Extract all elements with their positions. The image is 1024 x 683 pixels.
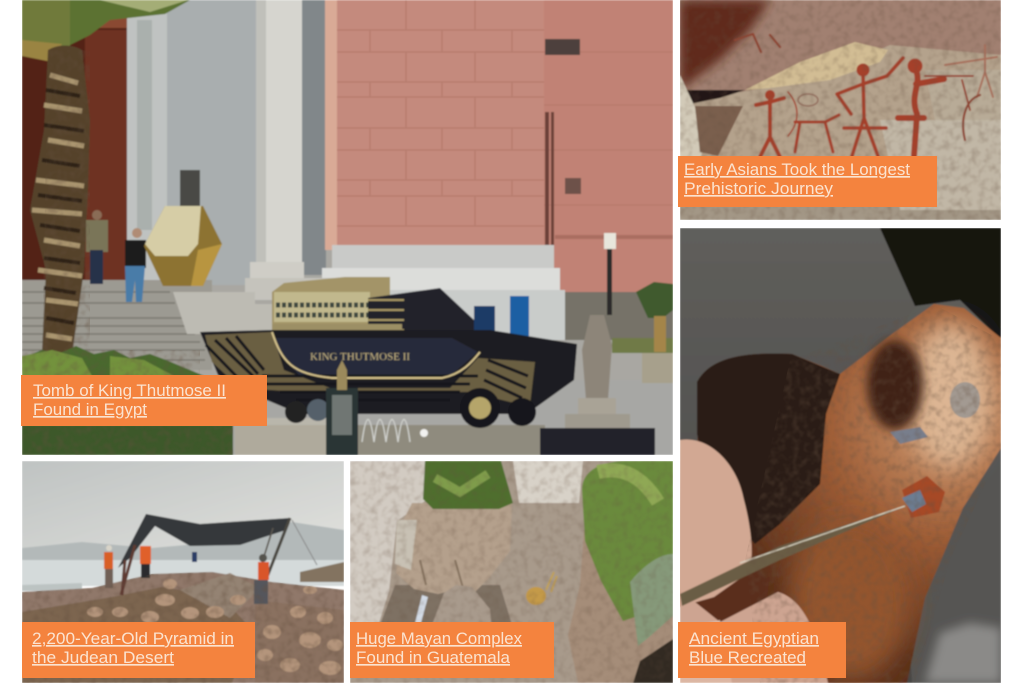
label: Early Asians bbox=[678, 156, 937, 207]
yellow artefact bbox=[526, 572, 557, 605]
ground bbox=[235, 338, 673, 455]
vehicle with cab: KING THUTMOSE II bbox=[310, 351, 410, 363]
door bbox=[22, 0, 127, 280]
label: Ancient Egyptian Blue: Ancient Egyptian bbox=[689, 630, 819, 648]
rock pile bbox=[22, 572, 344, 683]
panel: Mayan complex photo bbox=[350, 461, 673, 683]
visitors bbox=[86, 210, 146, 302]
small palm plant bbox=[636, 282, 673, 352]
painted red figures bbox=[735, 34, 997, 157]
label: Mayan Complex: Huge Mayan Complex bbox=[356, 630, 523, 648]
green bush bbox=[22, 346, 233, 455]
distant hills and water bbox=[22, 522, 344, 591]
label: Mayan Complex bbox=[350, 622, 554, 678]
museum wall bbox=[336, 0, 673, 295]
panel: Thutmose II photo bbox=[22, 0, 673, 455]
label: Early Asians: Early Asians Took the Longest bbox=[684, 161, 910, 179]
label: Mayan Complex: Found in Guatemala bbox=[356, 649, 511, 667]
fingers bbox=[679, 439, 828, 683]
upper rock shelf bbox=[680, 0, 1001, 220]
pale soil bbox=[350, 461, 583, 625]
gold hexagon sign bbox=[144, 206, 222, 286]
black tarp canopy bbox=[118, 514, 317, 595]
label: Judean Pyramid: 2,200-Year-Old Pyramid in bbox=[32, 630, 234, 648]
label: Judean Pyramid: the Judean Desert bbox=[32, 649, 174, 667]
vehicle with cab bbox=[200, 277, 577, 428]
dark background corner bbox=[880, 228, 1001, 340]
rock fragment bbox=[690, 304, 1001, 683]
ornate fence and fountain bbox=[326, 360, 428, 455]
label: Ancient Egyptian Blue bbox=[678, 622, 846, 678]
boulder and tool bbox=[414, 585, 492, 622]
steps bbox=[22, 280, 275, 370]
label: Judean Pyramid bbox=[22, 622, 255, 678]
tweezers bbox=[680, 506, 905, 606]
palm tree bbox=[22, 0, 190, 355]
label: Early Asians: Prehistoric Journey bbox=[684, 180, 834, 198]
label: Tomb of King Thutmose II bbox=[21, 375, 267, 426]
blue pigment chip bbox=[902, 476, 945, 518]
workers in orange bbox=[104, 545, 269, 604]
grey stone facade and column bbox=[127, 0, 337, 285]
panel: Egyptian blue photo bbox=[679, 228, 1001, 683]
label: Tomb of King Thutmose II: Found in Egypt bbox=[33, 401, 147, 419]
statue and lamp bbox=[540, 233, 655, 455]
stone stela with moss bbox=[395, 461, 513, 597]
label: Tomb of King Thutmose II: Tomb of King Thutmose II bbox=[33, 382, 226, 400]
panel: cave painting photo bbox=[680, 0, 1001, 220]
large mossy boulder bbox=[568, 461, 673, 683]
panel: Judean pyramid photo bbox=[22, 461, 344, 683]
plinth bbox=[245, 245, 673, 340]
label: Ancient Egyptian Blue: Blue Recreated bbox=[689, 649, 806, 667]
